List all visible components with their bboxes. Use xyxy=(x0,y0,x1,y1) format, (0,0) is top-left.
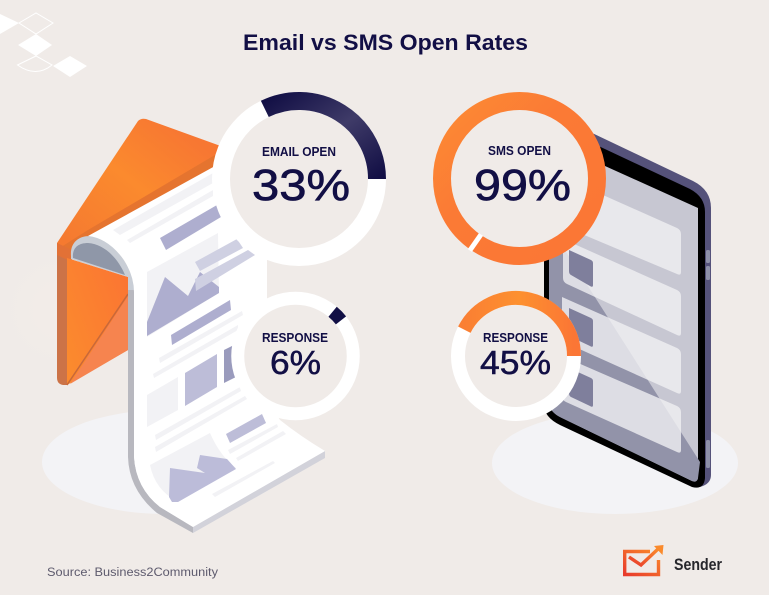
donut: email response 6% xyxy=(238,298,353,414)
phone screen dark glare xyxy=(549,225,700,482)
sender logo xyxy=(625,545,722,574)
sms response arc xyxy=(464,298,574,356)
dark purple block xyxy=(224,342,240,383)
purple bar top xyxy=(160,205,221,250)
paper roll rim xyxy=(71,236,134,290)
picture mountains xyxy=(147,272,219,336)
email open arc xyxy=(265,101,377,179)
sms open value: 99% xyxy=(474,161,571,210)
sms response label: RESPONSE xyxy=(483,330,548,345)
text lines lower xyxy=(150,424,286,502)
picture box xyxy=(147,233,219,337)
decorative diamond pattern icon xyxy=(0,13,87,77)
screen cards xyxy=(520,158,681,453)
illustration: envelope xyxy=(57,119,240,385)
paper roll inside xyxy=(73,243,125,275)
donut: sms response 45% xyxy=(458,298,574,414)
title: Email vs SMS Open Rates xyxy=(243,30,528,55)
envelope front xyxy=(67,258,128,385)
paper text lines top xyxy=(113,173,213,243)
email response arc xyxy=(333,312,341,320)
logo wordmark: Sender xyxy=(674,556,722,574)
sms open label: SMS OPEN xyxy=(488,143,551,158)
side buttons xyxy=(706,250,710,468)
purple bar lower xyxy=(226,414,266,443)
envelope flap shadow band xyxy=(58,152,220,258)
donut: email open 33% xyxy=(221,101,377,257)
paper thickness bottom xyxy=(193,451,325,533)
email response value: 6% xyxy=(270,344,321,381)
phone bezel xyxy=(544,130,705,488)
donut: sms open 99% xyxy=(442,101,597,256)
floating bars xyxy=(195,239,255,291)
envelope inner roll shade xyxy=(57,243,72,262)
text lines middle xyxy=(147,311,247,452)
phone body xyxy=(590,132,711,487)
envelope lower fold xyxy=(70,296,128,384)
purple bar middle xyxy=(171,300,231,345)
paper roll gray edge xyxy=(128,277,193,533)
lower mountains xyxy=(169,455,236,502)
illustration: phone xyxy=(520,130,711,488)
left shadow ellipse xyxy=(42,410,288,514)
right shadow ellipse xyxy=(492,412,738,514)
sms response value: 45% xyxy=(480,344,551,381)
source note: Source: Business2Community xyxy=(47,567,218,579)
sms open gap xyxy=(470,234,481,250)
logo envelope icon xyxy=(625,549,658,574)
envelope side xyxy=(57,243,67,385)
illustration: paper sheet xyxy=(71,155,325,533)
email open value: 33% xyxy=(252,161,350,210)
screen thumbnails xyxy=(569,250,593,407)
paper face xyxy=(88,155,325,527)
purple block xyxy=(185,354,217,406)
phone screen light xyxy=(549,150,698,482)
email open label: EMAIL OPEN xyxy=(262,144,336,159)
email response label: RESPONSE xyxy=(262,330,328,345)
envelope back flap xyxy=(57,119,240,262)
